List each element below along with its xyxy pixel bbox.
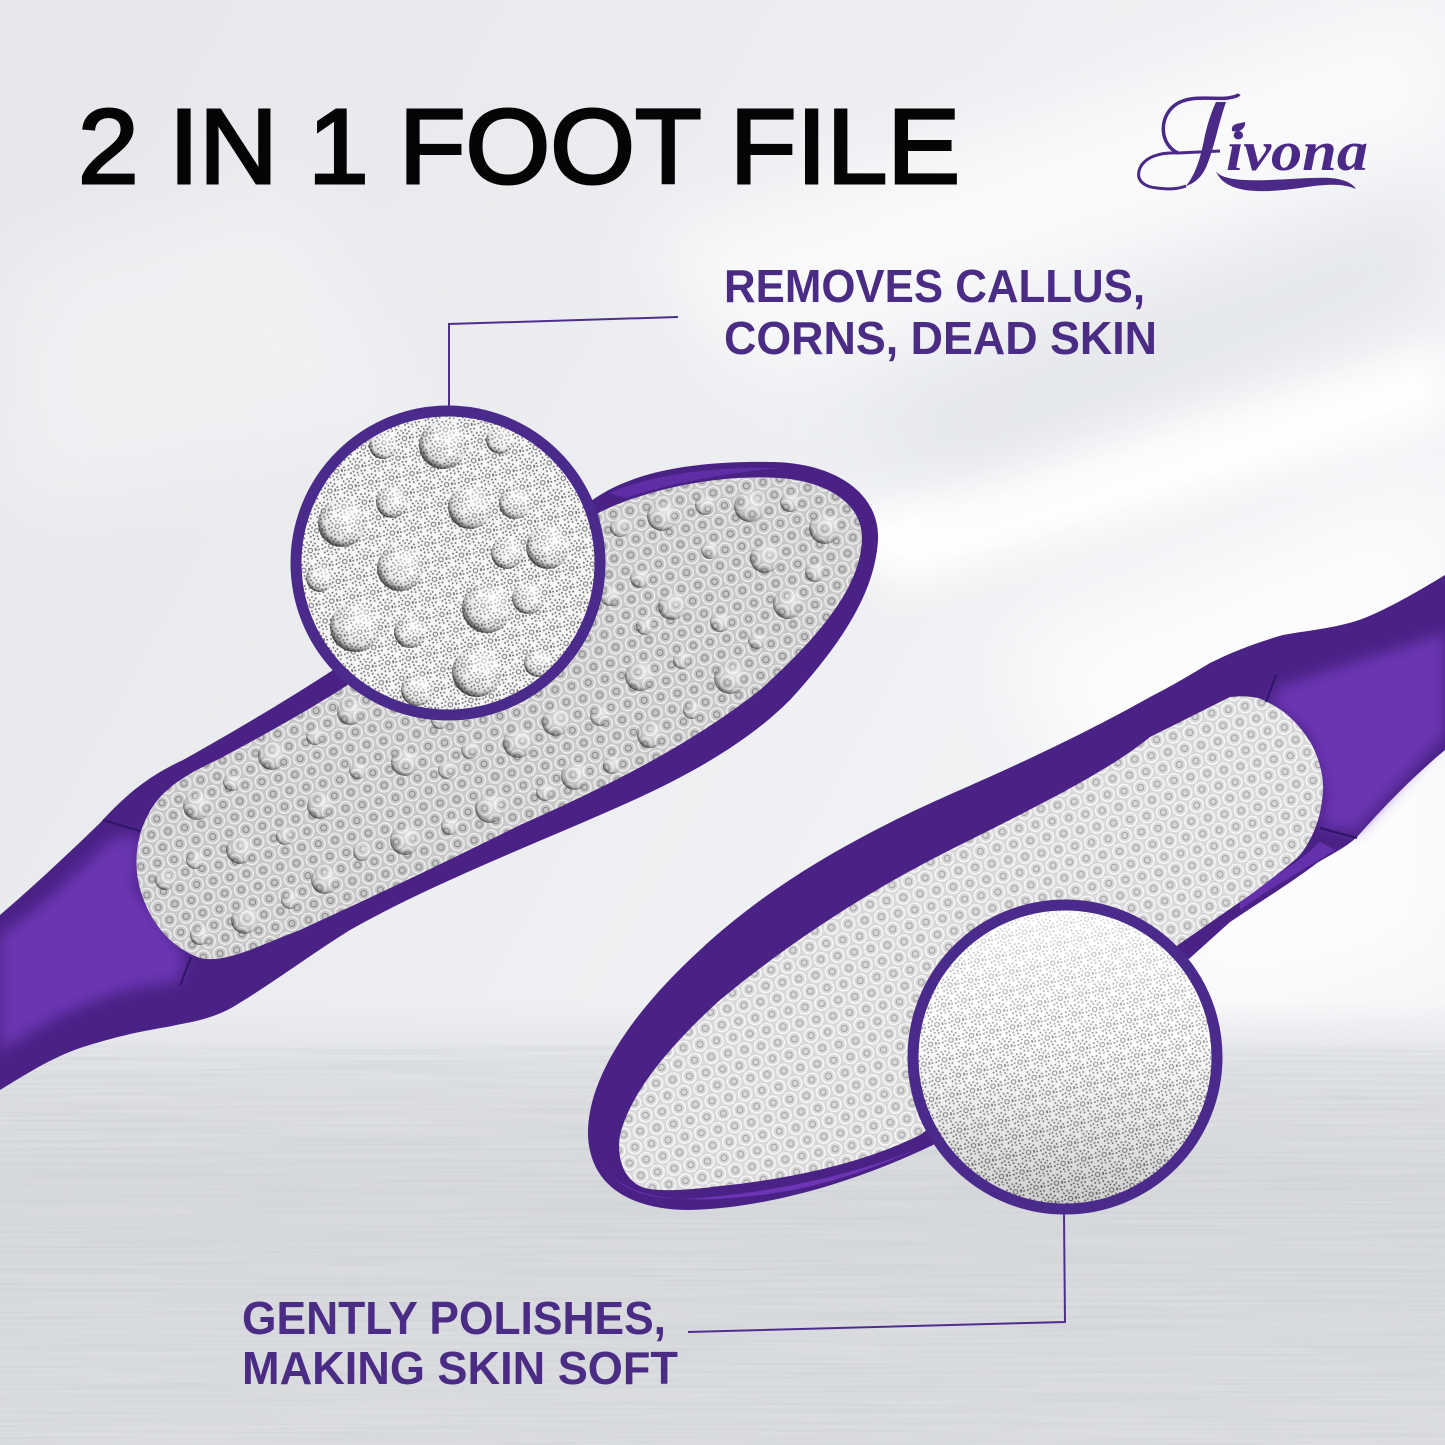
callout text: MAKING SKIN SOFT bbox=[242, 1342, 678, 1394]
callout: removes callus bbox=[449, 260, 1157, 406]
foot file: polishing side bbox=[588, 575, 1445, 1210]
title: 2 IN 1 FOOT FILE bbox=[78, 88, 960, 206]
rim highlight bbox=[1240, 842, 1335, 910]
foot file: callus side bbox=[0, 462, 878, 1090]
leader line bbox=[688, 1214, 1065, 1332]
callout text bbox=[724, 260, 1157, 364]
handle highlight bbox=[0, 835, 185, 1052]
rim highlight bbox=[610, 468, 780, 498]
silver plate bbox=[619, 696, 1323, 1190]
joint marks bbox=[103, 820, 191, 986]
leader line bbox=[449, 317, 678, 406]
magnified bumps bbox=[306, 421, 570, 706]
raised bumps bbox=[155, 490, 841, 945]
handle highlight bbox=[1270, 632, 1445, 832]
callout text bbox=[242, 1292, 678, 1394]
callout: gently polishes bbox=[242, 1214, 1065, 1394]
rim highlight lower bbox=[600, 1148, 920, 1199]
magnifier: callus texture bbox=[295, 410, 601, 716]
file body bbox=[588, 575, 1445, 1210]
magnifier: polishing texture bbox=[912, 904, 1218, 1210]
file body bbox=[0, 462, 878, 1090]
logo: Fivona: ivona bbox=[1226, 121, 1368, 183]
logo: Fivona bbox=[1139, 94, 1368, 191]
callout text: GENTLY POLISHES, bbox=[242, 1292, 666, 1344]
silver plate bbox=[136, 477, 862, 959]
callout text: REMOVES CALLUS, bbox=[724, 260, 1145, 312]
joint marks bbox=[1266, 675, 1357, 838]
callout text: CORNS, DEAD SKIN bbox=[724, 312, 1157, 364]
